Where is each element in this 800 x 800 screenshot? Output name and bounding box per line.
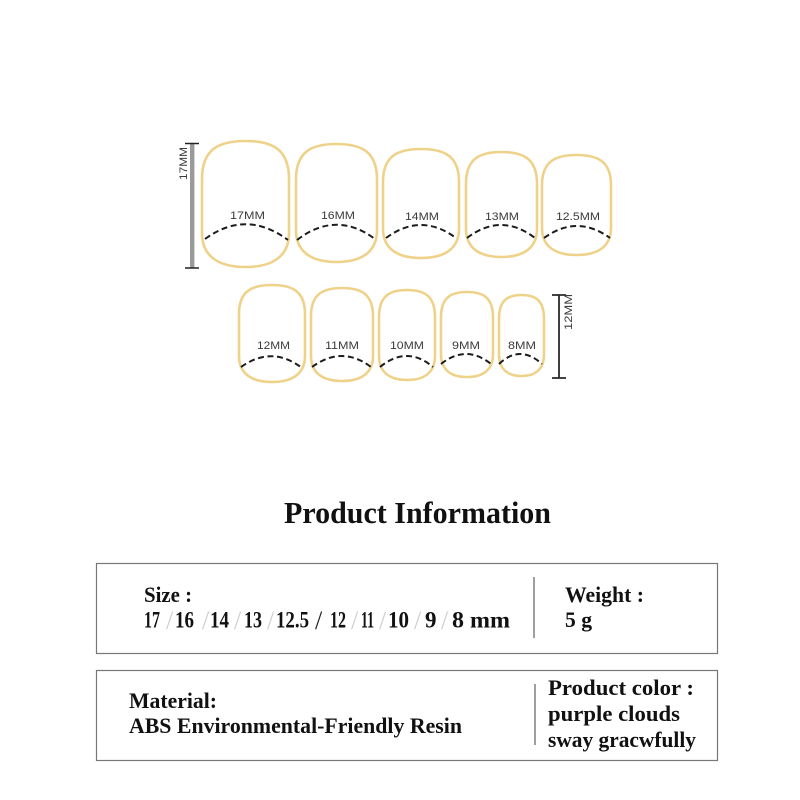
text block: size: 12.5 [276,608,309,632]
text block: weight: Weight : [565,582,644,607]
nail: 13MM: 13MM [485,211,519,223]
text block: size: 16 [175,608,194,632]
nail: 12.5MM: 12.5MM [556,211,600,223]
text block: size: / [441,606,449,635]
text block: size: / [234,606,242,635]
nail: 10MM [379,290,435,380]
text block: size: 11 [361,608,374,632]
text block: size: / [315,606,323,635]
text block: size: / [166,606,174,635]
title: Product Information [284,495,551,530]
nail: 9MM: 9MM [452,340,480,352]
text block: size: / [414,606,422,635]
text block: size: / [202,606,210,635]
text block: size: 12 [330,608,346,632]
text block: material [129,688,462,738]
text block: size: 14 [210,608,229,632]
text block: weight [565,582,644,632]
nail: 17MM: 17MM [230,210,265,222]
ruler: 17MM height: 17MM [178,147,190,180]
nail: 17MM [202,141,289,267]
text block: product color: sway gracwfully [548,727,696,752]
panel: size and weight [96,564,718,654]
text block: size: 8 mm [452,608,510,632]
nail: 13MM [466,152,537,257]
text block: size: / [379,606,387,635]
text block: product color: Product color : [548,675,694,700]
text block: size: / [351,606,359,635]
nail: 11MM [311,288,373,381]
text block: size: 13 [244,608,262,632]
nail: 16MM: 16MM [321,210,355,222]
text block: size: 10 [388,608,409,632]
nail: 8MM: 8MM [508,340,536,352]
ruler: 17MM height [178,143,199,268]
nail: 12.5MM [542,155,611,255]
text block: size: / [267,606,275,635]
text block: product color [548,675,696,752]
text block: material: ABS Environmental-Friendly Resin [129,713,462,738]
ruler: 12MM height: 12MM [563,294,575,330]
text block: size: Size : [144,582,192,607]
text block: size [144,582,510,635]
size chart: bottom row of nails [239,285,575,382]
nail: 10MM: 10MM [390,340,424,352]
nail: 11MM: 11MM [325,340,359,352]
panel: material and product color [96,670,718,760]
nail: 16MM [296,144,377,262]
text block: material: Material: [129,688,217,713]
text block: weight: 5 g [565,607,592,632]
nail: 12MM [239,285,305,382]
ruler: 12MM height [552,294,575,378]
text block: product color: purple clouds [548,701,680,726]
nail: 9MM [441,292,493,377]
nail: 12MM: 12MM [257,340,290,352]
text block: size: 9 [425,608,436,632]
nail: 14MM [383,149,459,258]
nail: 14MM: 14MM [405,211,439,223]
size chart: top row of nails [178,141,611,268]
text block: size: 17 [144,608,160,632]
nail: 8MM [499,295,544,376]
